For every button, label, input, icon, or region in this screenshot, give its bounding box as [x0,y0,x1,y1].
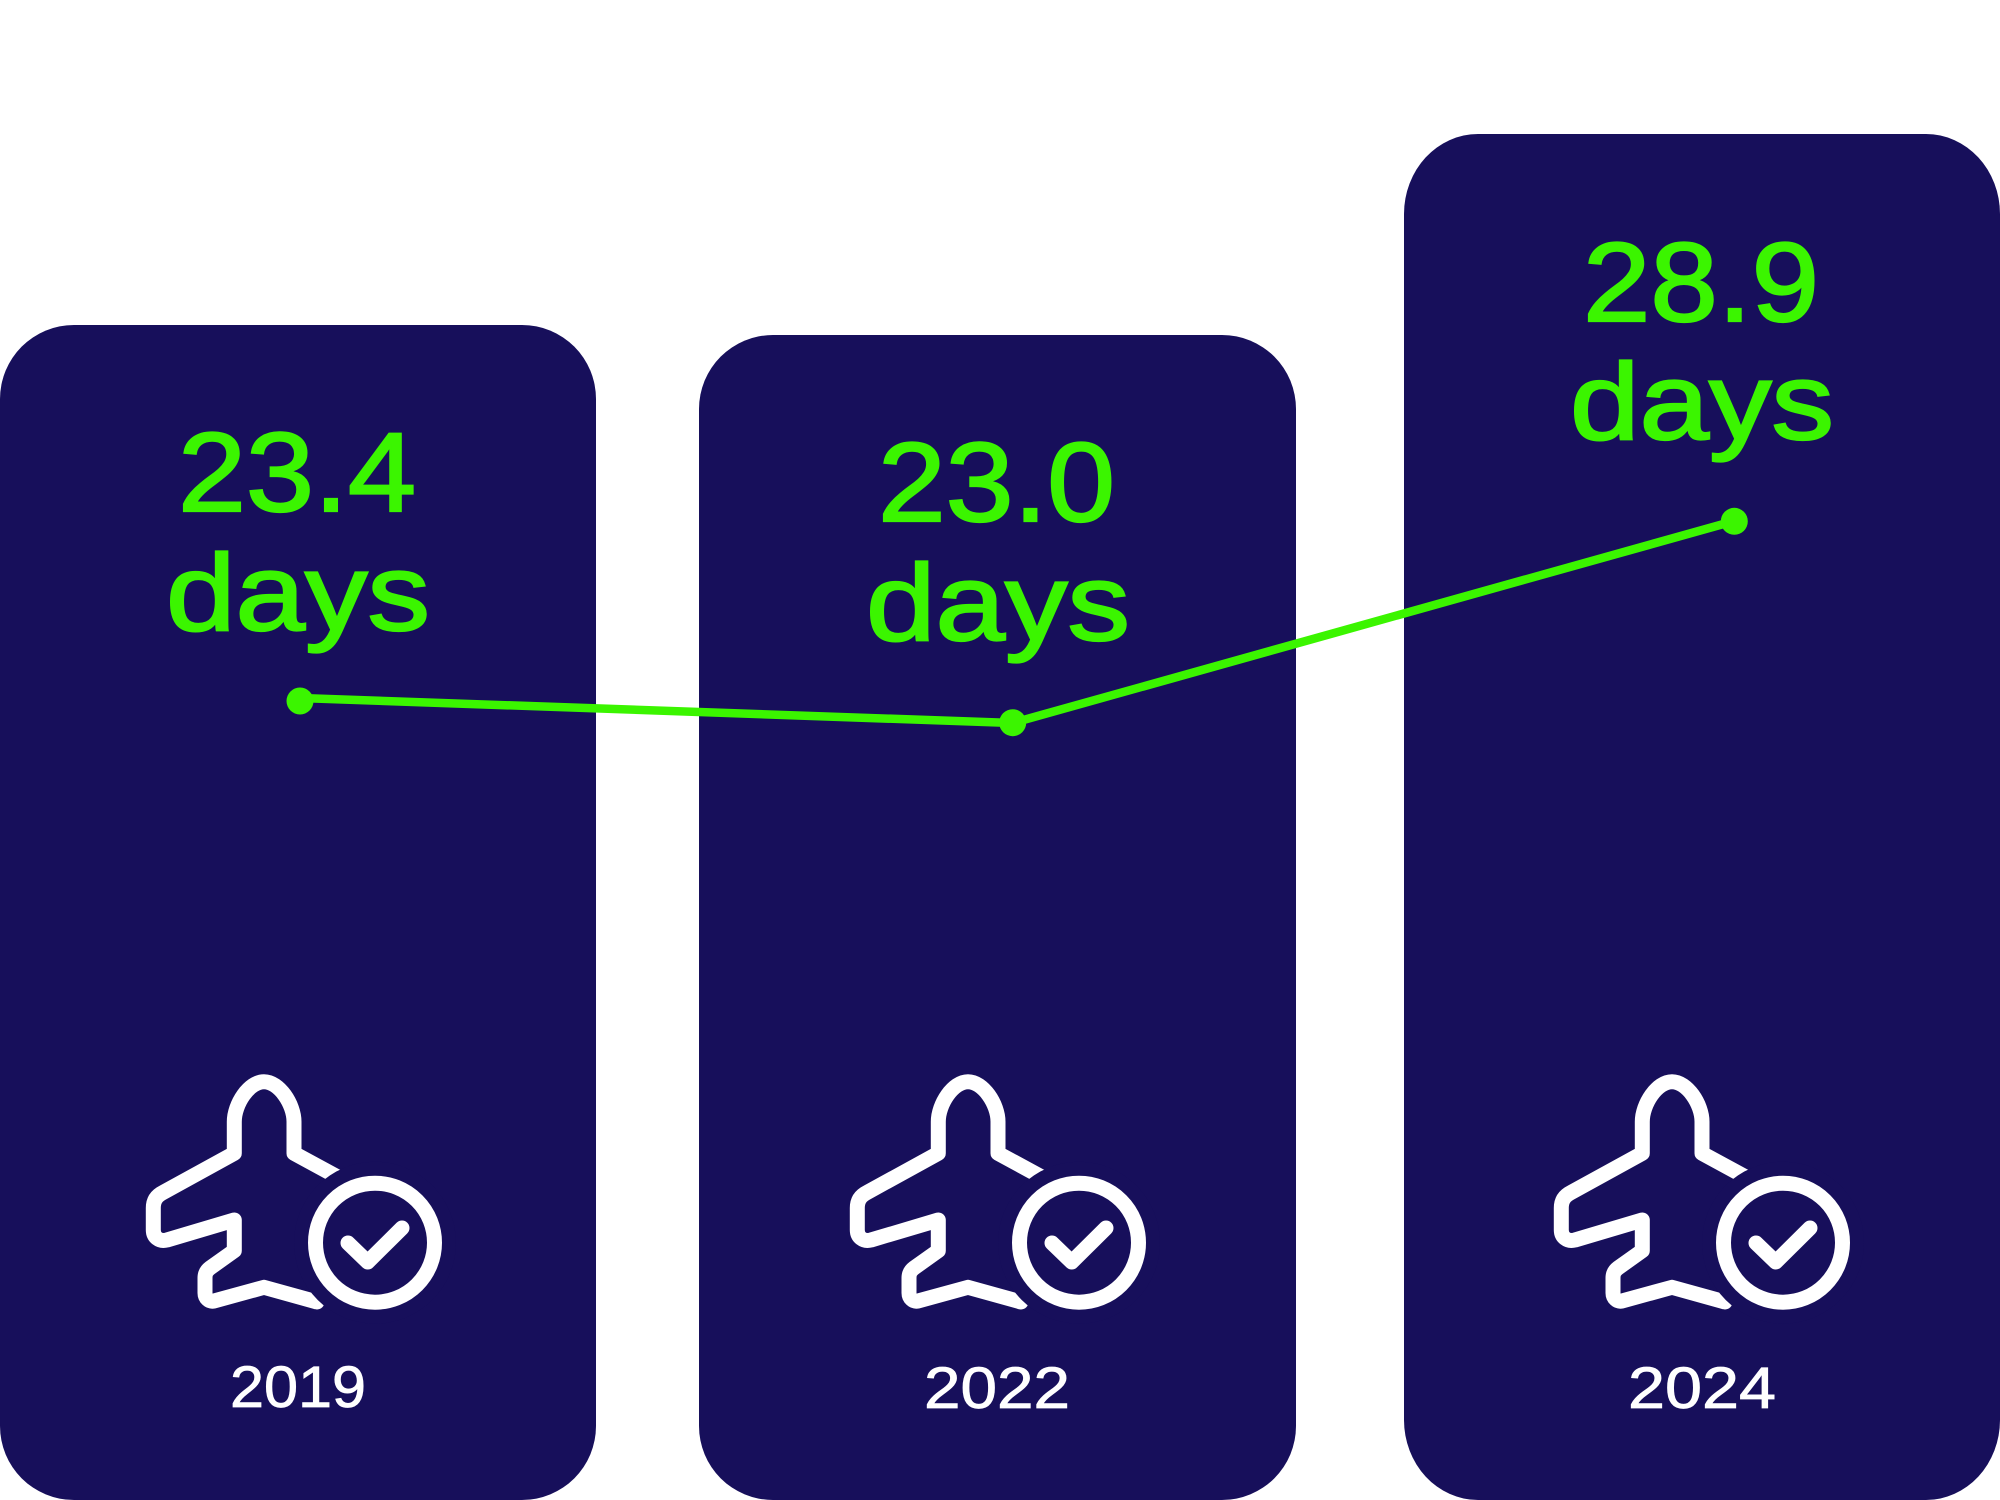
panel: 2019 bar [0,325,596,1500]
line chart: days trend [286,508,1748,736]
value: 2019: days [166,532,430,654]
icon: plane with check 2022 [857,1082,1160,1324]
panel: 2024 bar [1404,134,2000,1500]
value: 2022: 23.0 [878,420,1115,545]
icon: plane with check 2019 [153,1082,456,1324]
label: 2024: 2024 [1628,1356,1776,1421]
label: 2022: 2022 [924,1356,1070,1421]
value: 2022 [866,420,1130,664]
label: 2019: 2019 [230,1355,366,1420]
value: 2024 [1570,220,1834,463]
value: 2022: days [866,542,1130,664]
panel: 2022 bar [699,335,1296,1500]
value: 2019 [166,410,430,654]
value: 2024: 28.9 [1583,220,1819,345]
icon: plane with check 2024 [1561,1082,1864,1324]
value: 2019: 23.4 [178,410,416,535]
value: 2024: days [1570,341,1834,463]
